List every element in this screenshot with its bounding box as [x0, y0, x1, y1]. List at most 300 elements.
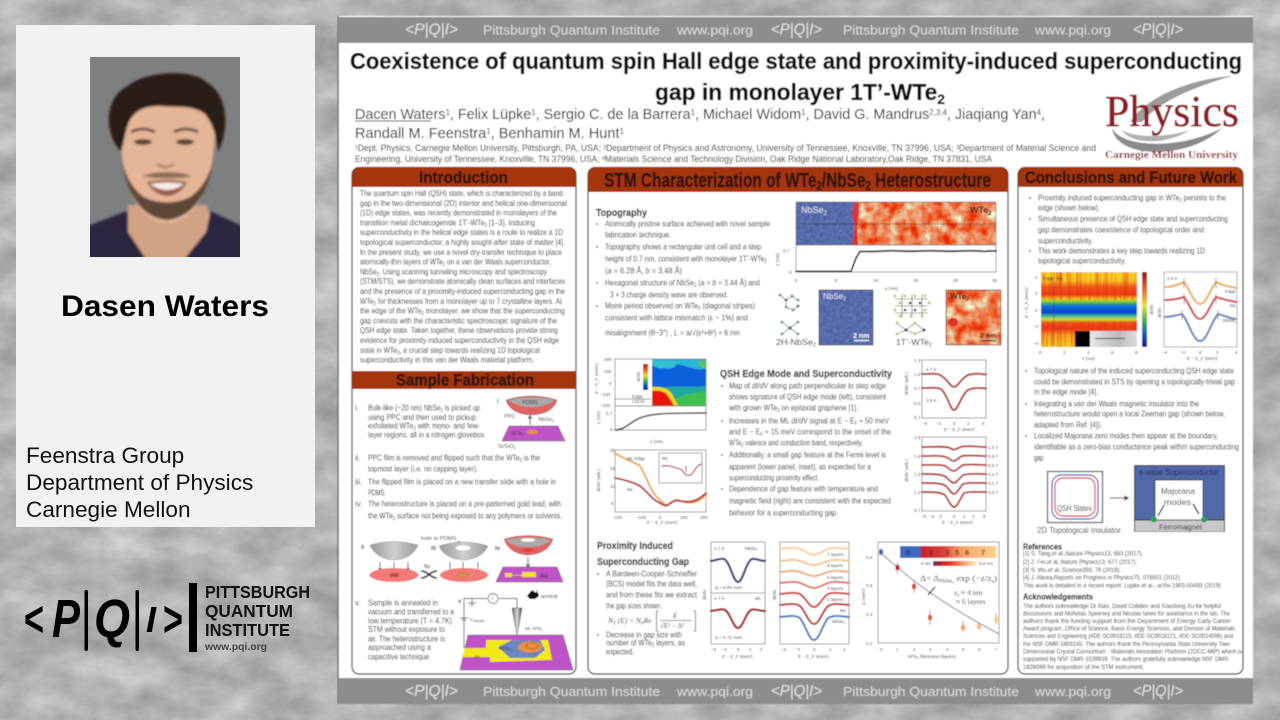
- authors: , Felix Lüpke: [450, 107, 531, 123]
- text: conclusions upper bullets: This work demonstrates a key step towards realizing 1D: [1038, 246, 1205, 256]
- chart: magnetic field dependence: 0.0 T: [988, 490, 999, 495]
- chart: gap size versus thickness: 0.4: [866, 612, 873, 617]
- diagram: step ii: [361, 542, 418, 582]
- diagram: step iv: iv: [495, 546, 501, 552]
- chart: ML edge and ML spectra: −200: [612, 515, 623, 520]
- diagram: STM setup: Au: [474, 654, 480, 659]
- text: fabrication step i: Bulk-like (~20 nm) NbSe: [368, 404, 453, 412]
- chart: NbSe2 and ML gap spectra: E − E_F (meV): [722, 654, 753, 659]
- text: QSH bullets: apparent (lower panel, inset), as expected for a: [729, 462, 872, 472]
- chart: NbSe2 and ML gap spectra: dI/dV: [702, 588, 707, 600]
- chart: magnetic field dependence: 2: [963, 514, 966, 519]
- text: introduction: 2: [421, 311, 424, 317]
- text: QSH bullets: with grown WTe: [729, 404, 784, 412]
- heading: sample fabrication: Sample Fabrication: [396, 372, 534, 390]
- chart: edge spectra comparison: ML: [1230, 303, 1237, 308]
- chart: gap size versus thickness: [861, 542, 999, 660]
- top band: Pittsburgh Quantum Institute: [483, 22, 660, 38]
- text: QSH bullets: Increases in the ML dI/dV signal at E − E: [729, 416, 860, 426]
- authors: , Sergio C. de la Barrera: [536, 107, 691, 123]
- text: conclusions lower bullets: Localized Majorana zero modes then appear at the boundary,: [1034, 432, 1218, 440]
- heading: QSH edge mode: QSH Edge Mode and Superconductivity: [720, 368, 892, 380]
- diagram: step iv: [495, 536, 563, 582]
- chart: dI/dV edge map: Edge: [632, 394, 643, 399]
- heading: topography: Topography: [596, 207, 647, 219]
- chart: layer-dependent spectra: ML: [840, 608, 847, 613]
- chart: NbSe2 and ML gap spectra: Δ = 0.84 meV: [715, 585, 744, 590]
- chart: dI/dV heatmap at edge: 8: [1135, 350, 1138, 355]
- text: introduction: monolayer, we show that the superconducting: [424, 307, 565, 316]
- diagram: 2H-NbSe2 lattice: 2H-NbSe: [776, 338, 809, 347]
- diagram: s-wave superconductor with Majorana modes: Ferromagnet: [1159, 522, 1203, 532]
- text: topography bullets: (a = 6.28 Å, b = 3.48 Å): [605, 266, 682, 276]
- heading: STM characterization: /NbSe: [822, 170, 866, 192]
- chart: gap size versus thickness: exp (−z/z: [954, 574, 992, 583]
- chart: edge spectra comparison: NbSe: [1223, 318, 1234, 323]
- chart: magnetic field dependence: −4: [929, 514, 935, 519]
- text: conclusions lower bullets: gap.: [1034, 454, 1045, 462]
- text: introduction: 2: [484, 223, 487, 229]
- top band: www.pqi.org: [1034, 22, 1111, 38]
- text: acknowledgements: authors thank the funding support from the Department of Energy Early Career: [1023, 618, 1231, 625]
- chart: NbSe2 and ML gap spectra: Δ = 0.72 meV: [715, 635, 744, 640]
- text: proximity bullets: and from these fits we extract: [606, 590, 698, 600]
- chart: height profile: 15: [913, 278, 919, 283]
- text: references: [4] J. Alicea,Reports on Progress in Physics75, 076501 (2012): [1023, 574, 1180, 582]
- icon: anneal flame: [527, 590, 558, 600]
- diagram: step iii: hole in PDMS: [421, 536, 457, 542]
- image: NbSe2 STM: 2: [843, 296, 846, 302]
- diagram: STM setup: v: [458, 599, 462, 605]
- chart: temperature dependence: 1.0: [914, 372, 921, 377]
- chart: ML edge and ML spectra: 200: [700, 515, 708, 520]
- chart: dI/dV edge map: 200: [604, 357, 612, 362]
- icon: anneal flame: anneal: [541, 594, 558, 600]
- chart: gap size versus thickness: 3: [945, 548, 949, 557]
- affiliation: [26, 443, 253, 522]
- text: QSH bullets: 2: [777, 408, 780, 414]
- text: fabrication steps ii to iv: surface not being exposed to any polymers or solvents.: [395, 512, 562, 520]
- heading: STM characterization: 2: [866, 179, 871, 193]
- text: QSH bullets: magnetic field (right) are consistent with the expected: [729, 496, 891, 506]
- chart: NbSe2 and ML gap spectra: −4: [711, 647, 717, 652]
- text: topography bullets: height of 0.7 nm, consistent with monolayer 1T’-WTe: [605, 254, 786, 264]
- text: introduction: The quantum spin Hall (QSH) state, which is characterized by a band: [360, 189, 563, 198]
- text: fabrication step i: with mono- and few-: [416, 422, 480, 430]
- text: proximity bullets: N: [608, 616, 613, 625]
- chart: gap size versus thickness: Δ= Δ: [920, 574, 936, 583]
- chart: magnetic field dependence: 6: [983, 514, 986, 519]
- text: introduction: and the presence of a proximity-induced superconducting gap in the: [360, 287, 565, 296]
- chart: gap size versus thickness: 0.2: [866, 641, 873, 646]
- chart: ML edge and ML spectra: 20: [610, 448, 616, 453]
- heading: STM characterization: 2: [816, 179, 822, 193]
- text: topography bullets: fabrication technique.: [605, 230, 671, 240]
- icon: flip arrows: flip: [424, 564, 431, 570]
- chart: temperature dependence: 0: [953, 421, 956, 426]
- text: introduction: QSH edge state. Taken together, these observations provide strong: [360, 326, 558, 335]
- chart: ML edge and ML spectra: 0: [659, 515, 662, 520]
- text: conclusions upper bullets: topological superconductivity.: [1038, 256, 1126, 266]
- bottom band: www.pqi.org: [1034, 684, 1111, 699]
- chart: magnetic field dependence: 1.0 T: [988, 445, 999, 450]
- text: fabrication step i: using PPC and then used to pickup: [368, 413, 477, 422]
- authors: , David G. Mandrus: [806, 107, 929, 123]
- bottom band: <P|Q|I>: [1133, 683, 1183, 700]
- chart: layer-dependent spectra: 2: [844, 621, 846, 625]
- text: references: [2] Z. Fei,et al.,Nature Physics13, 677 (2017).: [1023, 559, 1137, 566]
- text: topography bullets: 3 × 3 charge density wave are observed.: [610, 290, 728, 300]
- panel: conclusions and future work: [1018, 168, 1243, 674]
- text: acknowledgements: Dimensional Crystal Consortium - Materials Innovation Platform (2DCC-MIP) which is: [1023, 648, 1242, 656]
- chart: gap size versus thickness: ≈ 6 layers: [956, 597, 986, 606]
- text: fabrication steps ii to iv: PPC film is removed and flipped such that the WTe: [368, 454, 544, 462]
- chart: height profile: x (nm): [885, 286, 898, 291]
- text: fabrication step v: [355, 598, 455, 662]
- text: conclusions upper bullets: edge (shown below).: [1038, 204, 1100, 212]
- text: proximity bullets: √E² − Δ²: [660, 622, 684, 630]
- chart: magnetic field dependence: 1.9: [914, 435, 921, 440]
- diagram: 2D topological insulator: [1037, 472, 1121, 535]
- chart: gap size versus thickness: 2: [913, 647, 916, 652]
- diagram: s-wave superconductor with Majorana modes: s-wave Superconductor: [1139, 468, 1219, 477]
- chart: gap size versus thickness: 1: [929, 548, 933, 557]
- chart: temperature dependence: 2.8 K: [926, 398, 938, 403]
- chart: edge height profile: z (nm): [596, 411, 601, 424]
- chart: dI/dV heatmap at edge: Edge: [1043, 276, 1054, 281]
- text: QSH bullets: F: [855, 421, 857, 427]
- text: proximity bullets: (E) = N: [616, 616, 642, 625]
- image: WTe2 STM: 2 nm: [980, 333, 996, 340]
- diagram: STM setup: ML WTe: [525, 626, 541, 631]
- poster title: Coexistence of quantum spin Hall edge state and proximity-induced superconducting: [350, 48, 1242, 74]
- chart: magnetic field dependence: 1.0: [914, 490, 921, 495]
- text: introduction: (STM/STS), we demonstrate atomically clean surfaces and interfaces: [360, 277, 565, 286]
- diagram: 1T'-WTe2 lattice: 2: [929, 342, 932, 348]
- chart: layer-dependent spectra: −4: [781, 647, 787, 652]
- authors: 2,3,4: [929, 108, 947, 117]
- heading: introduction: Introduction: [419, 169, 508, 187]
- bottom band: <P|Q|I>: [771, 683, 822, 700]
- poster: [338, 16, 1253, 704]
- text: introduction: 2: [377, 272, 379, 278]
- text: fabrication step v: Sample is annealed in: [368, 598, 438, 608]
- chart: NbSe2 and ML gap spectra: 2: [756, 548, 758, 552]
- chart: gap size versus thickness: 6: [978, 647, 981, 652]
- chart: dI/dV edge map: [594, 357, 706, 408]
- text: introduction: NbSe: [360, 267, 380, 276]
- bottom band: Pittsburgh Quantum Institute: [843, 684, 1019, 699]
- chart: NbSe2 and ML gap spectra: 0: [737, 647, 740, 652]
- text: proximity bullets: number of WTe: [606, 638, 659, 648]
- top band: <P|Q|I>: [405, 22, 458, 38]
- chart: height profile: 0.7: [783, 248, 790, 254]
- chart: dI/dV heatmap at edge: 0: [1039, 350, 1042, 355]
- chart: NbSe2 and ML gap spectra: 4.7 K: [714, 596, 726, 601]
- text: introduction: gap coexists with the characteristic spectroscopic signature of the: [360, 316, 557, 325]
- diagram: STM setup: 2: [541, 628, 543, 632]
- text: conclusions lower bullets: [1025, 366, 1239, 462]
- bottom band: www.pqi.org: [676, 684, 753, 699]
- chart: gap size versus thickness: thickness (layers): [919, 654, 956, 659]
- text: fabrication steps ii to iv: 2: [393, 516, 395, 522]
- chart: edge height profile: 0.7: [606, 411, 613, 416]
- chart: edge spectra comparison: Edge: [1225, 289, 1236, 294]
- chart: temperature dependence: 0.4: [914, 401, 921, 406]
- text: conclusions upper bullets: [1029, 194, 1228, 266]
- chart: edge spectra comparison: 4: [1235, 350, 1238, 355]
- chart: NbSe2 and ML gap spectra: 4: [760, 647, 763, 652]
- text: fabrication step i: is picked up: [443, 404, 481, 412]
- authors: 1: [486, 127, 491, 136]
- panel: presenter card: [16, 25, 315, 527]
- text: topography bullets: 2: [765, 259, 767, 265]
- text: proximity bullets: [597, 570, 698, 656]
- affiliation: Department of Physics: [26, 470, 253, 495]
- chart: magnetic field dependence: 1.6: [914, 454, 921, 459]
- text: fabrication step v: low temperature (T = 4.7K): [368, 616, 452, 626]
- image: WTe2 STM: WTe: [950, 292, 966, 301]
- authors: , Benhamin M. Hunt: [491, 126, 620, 142]
- text: proximity bullets: 2: [652, 643, 654, 649]
- authors: 1: [691, 108, 696, 117]
- chart: dI/dV heatmap at edge: dI/dV: [1149, 303, 1154, 315]
- logo: Pittsburgh Quantum Institute: P: [52, 589, 81, 649]
- diagram: step iii: iii: [431, 546, 436, 552]
- chart: dI/dV heatmap at edge: ML: [1057, 276, 1064, 281]
- chart: dI/dV edge map: E − E_F (meV): [594, 363, 599, 394]
- chart: dI/dV heatmap at edge: 2: [1035, 291, 1038, 296]
- chart: gap size versus thickness: ): [994, 574, 997, 583]
- text: QSH bullets: on epitaxial graphene [1].: [780, 404, 858, 412]
- chart: temperature dependence: 4.7 K: [926, 367, 938, 372]
- chart: ML edge and ML spectra: 5: [611, 501, 614, 506]
- affiliations: Engineering, University of Tennessee, Knoxville, TN 37996, USA;: [355, 154, 609, 164]
- authors: , Jiaqiang Yan: [947, 107, 1037, 123]
- chart: dI/dV edge map: 0: [609, 381, 612, 386]
- presenter name: Dasen Waters: [61, 290, 269, 323]
- text: introduction: [360, 189, 567, 365]
- text: QSH bullets: ≈ 15 meV correspond to the onset of the: [763, 428, 891, 436]
- chart: magnetic field dependence: E − E_F (meV): [942, 520, 973, 525]
- chart: NbSe2 and ML gap spectra: [702, 542, 765, 659]
- logo: Pittsburgh Quantum Institute: PITTSBURGH: [205, 582, 310, 602]
- chart: magnetic field dependence: dI/dV (arb.): [904, 459, 909, 482]
- text: QSH bullets: 2: [741, 443, 744, 449]
- diagram: step i stacking: Si/SiO: [498, 444, 514, 450]
- text: conclusions lower bullets: could be demonstrated in STS by opening a topologically-trivial gap: [1034, 378, 1236, 386]
- chart: edge height profile: 0: [610, 427, 613, 432]
- chart: magnetic field dependence: 1.3: [914, 472, 921, 477]
- chart: layer-dependent spectra: 2: [829, 647, 832, 652]
- chart: NbSe2 and ML gap spectra: ML: [755, 596, 762, 601]
- text: conclusions lower bullets: Integrating a van der Waals magnetic insulator into the: [1034, 400, 1199, 408]
- text: introduction: , a crucial step towards realizing 1D topological: [399, 346, 540, 355]
- text: acknowledgements: 1626099 for acquisition of the STM instrument.: [1023, 664, 1144, 671]
- affiliations: 4: [602, 156, 605, 162]
- chart: ML edge and ML spectra: E − E_F (meV): [647, 520, 678, 525]
- chart: dI/dV heatmap at edge: 6: [1111, 350, 1114, 355]
- diagram: step iii: [421, 536, 488, 582]
- text: conclusions upper bullets: 2: [1179, 198, 1182, 204]
- chart: height profile: 20: [953, 278, 959, 283]
- chart: height profile: 5: [834, 278, 838, 283]
- text: conclusions lower bullets: heterostructure would open a local Zeeman gap (shown below,: [1034, 410, 1225, 418]
- text: introduction: . Using scanning tunneling microscopy and spectroscopy: [379, 267, 547, 276]
- image: WTe2 STM: 2: [966, 296, 969, 302]
- diagram: s-wave superconductor with Majorana modes: Majorana: [1161, 487, 1196, 496]
- chart: edge spectra comparison: E − E_F (meV): [1187, 356, 1218, 361]
- text: topography bullets: Moiré period observed on WTe: [605, 302, 711, 310]
- chart: magnetic field dependence: 4: [972, 514, 975, 519]
- text: acknowledgements: supported by NSF DMR-1539916. The authors gratefully acknowledge NSF DMR-: [1023, 656, 1230, 663]
- chart: layer-dependent spectra: 4: [843, 647, 846, 652]
- diagram: STM setup: sample: [473, 619, 484, 623]
- heading: introduction: [352, 168, 576, 187]
- logo: Carnegie Mellon Physics: [1105, 76, 1239, 161]
- diagram: step i stacking: PPC: [504, 414, 515, 420]
- chart: NbSe2 and ML gap spectra: 4.7 K: [714, 546, 726, 551]
- authors: [355, 107, 1045, 142]
- chart: gap size versus thickness: 3: [929, 647, 932, 652]
- chart: layer-dependent spectra: 7 layers: [827, 552, 844, 557]
- text: introduction: superconductivity in the helical edge states is a route to realize a 1D: [360, 228, 563, 237]
- text: conclusions lower bullets: Topological nature of the induced superconducting QSH edge state: [1034, 366, 1234, 376]
- poster title: [350, 48, 1242, 107]
- text: introduction: In the present study, we use a novel dry-transfer technique to place: [360, 248, 562, 257]
- affiliations: Materials Science and Technology Division, Oak Ridge National Laboratory,Oak Ridge, TN 37831, USA: [605, 154, 992, 164]
- text: fabrication steps ii to iv: [355, 454, 562, 522]
- text: QSH bullets: [721, 382, 891, 518]
- heading: proximity induced gap: Proximity Induced: [597, 540, 673, 552]
- diagram: STM setup: [458, 594, 573, 670]
- chart: temperature dependence: 0.7: [914, 386, 921, 391]
- top band: Pittsburgh Quantum Institute: [843, 22, 1019, 38]
- chart: dI/dV heatmap at edge: −2: [1033, 324, 1039, 329]
- chart: dI/dV edge map: −100: [600, 392, 611, 397]
- chart: dI/dV heatmap at edge: 4: [1087, 350, 1090, 355]
- text: proximity bullets: the gap sizes shown.: [606, 602, 662, 610]
- heading: proximity induced gap: [597, 540, 689, 568]
- text: proximity bullets: A Bardeen-Cooper-Schrieffer: [606, 570, 697, 578]
- chart: ML edge and ML spectra: dI/dV (arb.): [596, 469, 601, 492]
- text: QSH bullets: Dependence of gap feature with temperature and: [729, 484, 878, 494]
- image: WTe2 STM: [946, 290, 1001, 345]
- chart: NbSe2 and ML gap spectra: NbSe: [745, 546, 756, 551]
- diagram: s-wave superconductor with Majorana modes: modes: [1164, 498, 1191, 507]
- chart: ML edge and ML spectra: 15: [610, 466, 616, 471]
- chart: ML edge and ML spectra: [596, 448, 708, 525]
- arrow: TI to superconductor: [1110, 496, 1128, 500]
- text: introduction: 2: [374, 301, 376, 307]
- authors: 1: [445, 108, 450, 117]
- chart: edge height profile: [596, 406, 706, 444]
- chart: gap size versus thickness: 7: [981, 548, 985, 557]
- text: references: This work is detailed in a recent report: Lupke et al., arXiv:1903.00493 (2019): [1023, 582, 1221, 590]
- chart: NbSe2 and ML gap spectra: −2: [722, 647, 728, 652]
- text: topography bullets: consistent with lattice mismatch (ε ~ 1%) and: [605, 314, 748, 322]
- text: fabrication steps ii to iv: the WTe: [368, 512, 397, 520]
- diagram: STM setup: NbSe: [499, 646, 510, 651]
- text: QSH bullets: Additionally, a small gap feature at the Fermi level is: [729, 450, 886, 460]
- chart: dI/dV edge map: −200: [600, 403, 611, 408]
- text: QSH bullets: WTe: [729, 438, 745, 448]
- chart: dI/dV edge map: 100: [604, 369, 612, 374]
- diagram: STM setup: 2: [510, 648, 512, 652]
- chart: height profile: 10: [873, 278, 879, 283]
- chart: magnetic field dependence: −2: [937, 514, 943, 519]
- text: topography bullets: [596, 220, 770, 338]
- chart: edge spectra comparison: 2.8 K: [1167, 276, 1179, 281]
- heading: proximity induced gap: Superconducting Gap: [597, 556, 689, 568]
- chart: edge spectra comparison: 0: [1199, 350, 1202, 355]
- text: introduction: WTe: [360, 297, 376, 306]
- chart: magnetic field dependence: 0.2 T: [988, 481, 999, 486]
- chart: gap size versus thickness: WTe: [908, 654, 917, 659]
- chart: STM topography image: 2: [824, 211, 828, 217]
- chart: layer-dependent spectra: 6 layers: [827, 563, 844, 568]
- chart: gap size versus thickness: 4: [946, 647, 949, 652]
- text: QSH bullets: and E − E: [729, 428, 763, 436]
- chart: gap size versus thickness: 1: [896, 647, 899, 652]
- diagram: 2H-NbSe2 lattice: [776, 294, 816, 348]
- text: conclusions upper bullets: persists to the: [1182, 194, 1226, 202]
- text: topography bullets: a = b = 3.44 Å) and: [701, 278, 765, 288]
- chart: edge spectra comparison: [1157, 272, 1238, 361]
- logo: Carnegie Mellon Physics: Carnegie Mellon University: [1105, 150, 1239, 161]
- chart: dI/dV edge map: dI/dV: [636, 370, 641, 382]
- affiliations: 1: [355, 145, 358, 151]
- text: acknowledgements: Sciences and Engineering (#DE-SC0018115, #DE-SC0018121, #DE-SC0014506) and: [1023, 633, 1233, 640]
- text: fabrication step v: capacitive technique.: [368, 652, 431, 662]
- chart: magnetic field dependence: 0.8 T: [988, 454, 999, 459]
- heading: STM characterization: [588, 168, 1008, 193]
- chart: temperature dependence: 4: [982, 421, 985, 426]
- chart: gap size versus thickness: 0.8: [866, 555, 873, 560]
- affiliations: 3: [956, 145, 959, 151]
- chart: height profile: [775, 245, 998, 291]
- chart: ML edge and ML spectra: −100: [636, 515, 647, 520]
- text: QSH bullets: Map of dI/dV along path perpendicular to step edge: [729, 382, 886, 390]
- diagram: 2D topological insulator: 2D Topological Insulator: [1037, 525, 1121, 535]
- text: acknowledgements: the NSF DMR-1809145. The authors thank the Pennsylvania State University Two-: [1023, 641, 1231, 648]
- text: fabrication step v: vacuum and transferred to a: [368, 608, 455, 616]
- chart: NbSe2 and ML gap spectra: 2: [749, 647, 752, 652]
- diagram: step i stacking: PDMS: [522, 400, 538, 406]
- diagram: STM setup: I: [492, 596, 494, 602]
- text: conclusions upper bullets: superconductivity.: [1038, 236, 1093, 246]
- chart: magnetic field dependence: −6: [921, 514, 927, 519]
- chart: layer-dependent spectra: 0: [813, 647, 816, 652]
- text: fabrication step i: 2: [441, 408, 443, 414]
- authors: 1: [801, 108, 806, 117]
- text: fabrication steps ii to iv: The heterostructure is placed on a pre-patterned gold lead, with: [368, 500, 561, 508]
- chart: dI/dV heatmap at edge: 4: [1035, 275, 1038, 280]
- text: conclusions upper bullets: gap demonstrates coexistence of topological order and: [1038, 226, 1204, 234]
- text: proximity bullets: expected.: [606, 648, 634, 656]
- text: acknowledgements: The authors acknowledge Di Xiao, David Cobden and Xiaodong Xu for helpful: [1023, 603, 1221, 610]
- text: fabrication steps ii to iv: topmost layer (i.e. no capping layer).: [368, 464, 478, 474]
- text: introduction: 2: [397, 350, 400, 356]
- text: introduction: transition metal dichalcogenide 1T’-WTe: [360, 218, 498, 227]
- logo: Pittsburgh Quantum Institute: >: [163, 591, 183, 647]
- text: introduction: topological superconductor, a highly sought-after state of matter [4].: [360, 238, 565, 247]
- chart: height profile: 0: [794, 278, 798, 283]
- chart: STM topography image: WTe: [970, 205, 988, 215]
- chart: edge spectra comparison: dI/dV: [1157, 306, 1162, 318]
- chart: gap size versus thickness: ≈ 4 nm: [959, 588, 983, 597]
- diagram: step i stacking: WTe: [511, 431, 522, 437]
